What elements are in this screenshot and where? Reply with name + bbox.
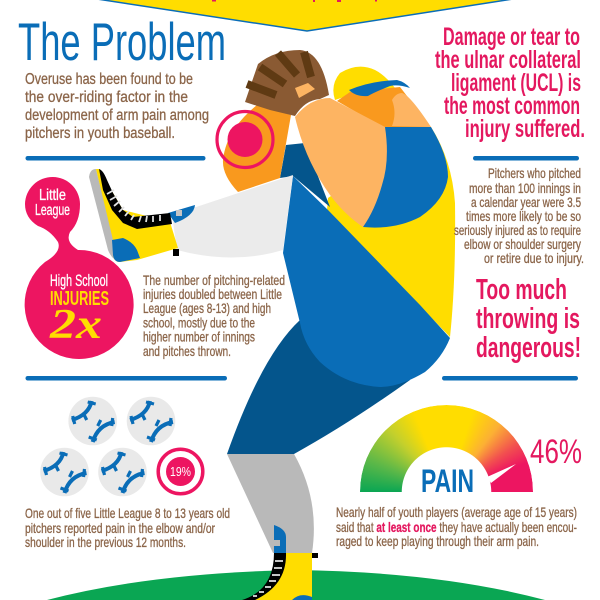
little league to high school blob: [25, 177, 134, 359]
front shoe: [242, 553, 318, 600]
callout: too much throwing: [476, 274, 581, 364]
head: [333, 67, 431, 127]
intro text: Overuse has been found to be: [25, 71, 193, 88]
pants: [283, 176, 450, 387]
injuries text: League (ages 8-13) and high: [143, 300, 271, 316]
little league pain text: pitchers reported pain in the elbow and/or: [25, 520, 215, 536]
back thigh: [172, 175, 293, 258]
pitcher figure: [89, 50, 455, 600]
19 percent target: 19%: [170, 464, 191, 479]
intro text: the over-riding factor in the: [25, 89, 188, 106]
injuries text: school, mostly due to the: [143, 314, 255, 330]
injuries text: [143, 272, 285, 359]
little league to high school blob: League: [35, 202, 70, 219]
upper arm: [295, 98, 387, 227]
trailing thigh dark: [227, 320, 410, 454]
banner: [97, 0, 513, 31]
little league pain text: shoulder in the previous 12 months.: [25, 534, 186, 550]
callout: UCL injury: [435, 23, 585, 143]
intro text: pitchers in youth baseball.: [25, 125, 175, 142]
front sock: [274, 525, 286, 553]
youth players text: [336, 504, 577, 549]
injuries text: higher number of innings: [143, 329, 255, 345]
title: The Problem: [18, 13, 226, 72]
little league to high school blob: 2x: [49, 302, 102, 348]
back shoe: [89, 169, 179, 262]
little league to high school blob: Little: [39, 187, 66, 204]
injuries text: injuries doubled between Little: [143, 286, 282, 302]
gauge needle: [487, 464, 516, 483]
body blue: [363, 127, 448, 228]
forearm: [223, 105, 291, 192]
glove: [245, 50, 329, 116]
intro text: [25, 71, 209, 142]
little league pain text: One out of five Little League 8 to 13 years old: [25, 505, 230, 521]
gauge label: PAIN: [421, 463, 474, 499]
little league to high school blob: High School: [50, 271, 108, 290]
little league pain text: [25, 505, 230, 550]
injuries text: The number of pitching-related: [143, 272, 285, 288]
front leg: [227, 454, 314, 553]
19 percent target: [158, 449, 203, 494]
torso dark: [280, 143, 330, 207]
injuries text: and pitches thrown.: [143, 343, 231, 359]
field: [47, 570, 545, 600]
pain target: [217, 112, 273, 168]
back sock: [168, 205, 195, 223]
pitchers text: [454, 165, 584, 266]
pain gauge: [360, 405, 533, 492]
little league to high school blob: INJURIES: [50, 288, 109, 310]
intro text: development of arm pain among: [25, 107, 209, 124]
yellow jersey: [327, 127, 455, 337]
baseballs: [40, 397, 175, 496]
46 percent: 46%: [530, 433, 582, 471]
